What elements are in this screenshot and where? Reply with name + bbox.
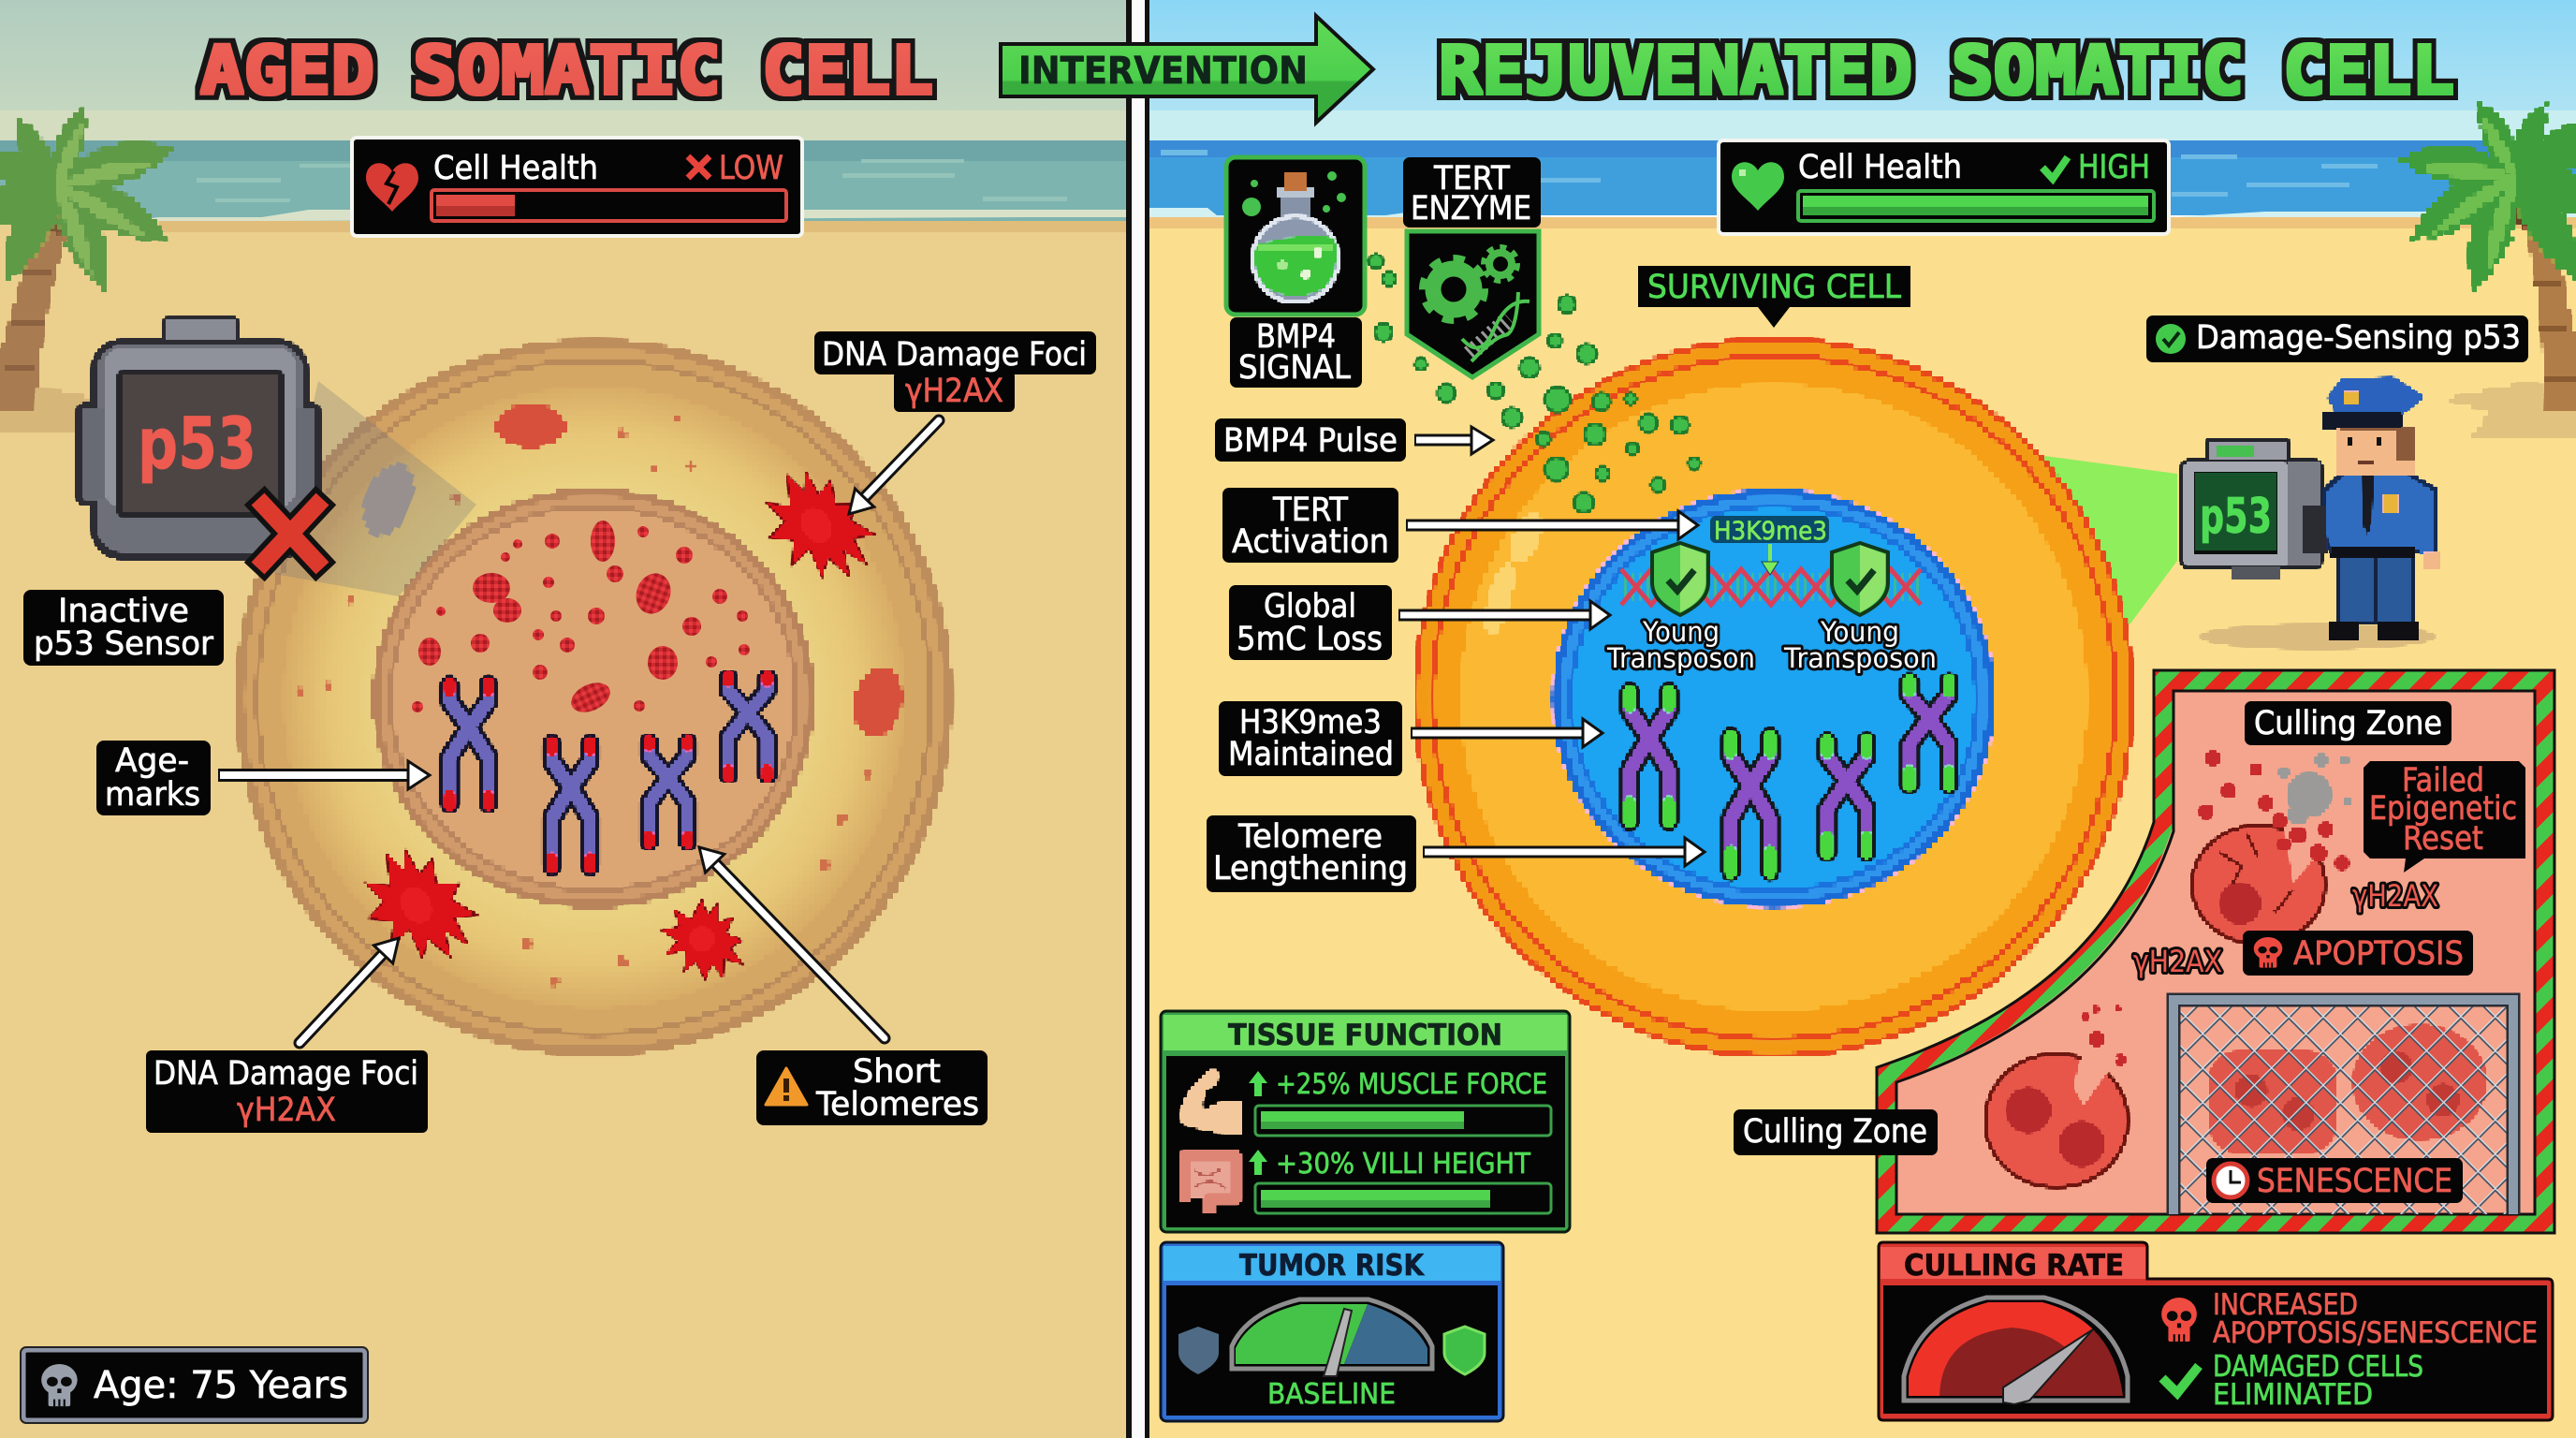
label: global 5mC loss: 5mC Loss: [1237, 621, 1383, 658]
stat: muscle force: [1249, 1068, 1551, 1136]
senescence cage: [2174, 1000, 2513, 1214]
icon: broken heart: [366, 163, 418, 212]
cracked cell lower: [1983, 1052, 2130, 1189]
panel: culling rate: ELIMINATED: [2213, 1378, 2373, 1412]
label: DNA damage foci upper: [814, 331, 1096, 412]
label: TERT activation: Activation: [1232, 523, 1389, 561]
icon: green shield: [1444, 1327, 1485, 1374]
label: senescence: [2206, 1158, 2463, 1203]
label: culling zone inner: Culling Zone: [2254, 705, 2442, 742]
label: young transposon left: Young: [1642, 616, 1720, 648]
inactive p53 sensor: p53: [138, 402, 256, 485]
label: surviving cell: SURVIVING CELL: [1647, 269, 1901, 306]
arrow: global 5mC loss: [1398, 601, 1610, 629]
health bar: high: [1719, 140, 2169, 234]
intervention arrow: INTERVENTION: [1018, 50, 1308, 93]
icon: intestine: [1185, 1156, 1236, 1214]
label: short telomeres: Telomeres: [815, 1086, 979, 1123]
shield: young transposon right: [1832, 543, 1888, 615]
label: H3K9me3 maintained: H3K9me3: [1239, 704, 1382, 741]
gauge: high culling: [1904, 1298, 2128, 1404]
grey organelle: [354, 457, 423, 543]
label: inactive p53 sensor: p53 Sensor: [34, 625, 214, 663]
label: age-marks: Age-: [115, 742, 189, 780]
arrow: age-marks to chromosome: [218, 761, 430, 789]
label: DNA damage foci lower: DNA Damage Foci: [154, 1055, 418, 1093]
title: rejuvenated somatic cell: CELL: [2283, 32, 2454, 110]
damage speckles in nucleus: [412, 521, 750, 718]
icon: clock: [2214, 1164, 2247, 1197]
label: inactive p53 sensor: [23, 590, 224, 666]
label: DNA damage foci upper: γH2AX: [905, 373, 1003, 410]
title: rejuvenated somatic cell: REJUVENATED: [1439, 32, 1912, 110]
age badge: Age: 75 Years: [94, 1364, 348, 1407]
grey smoke: [2278, 754, 2352, 825]
aged cell: [236, 339, 953, 1056]
label: TERT enzyme: ENZYME: [1411, 190, 1531, 227]
icon: green check: [2162, 1366, 2199, 1393]
stat: villi height: [1249, 1148, 1551, 1213]
age badge: [21, 1347, 368, 1423]
label: short telomeres: [756, 1050, 988, 1125]
health bar: low: [352, 138, 802, 236]
label: young transposon right: [1783, 616, 1937, 674]
cracked apoptotic cell: [2190, 824, 2329, 946]
label: telomere lengthening: [1207, 815, 1416, 892]
icon: flask: [1251, 171, 1340, 304]
chromosomes with long green telomeres: [1630, 681, 1949, 872]
label: apoptosis: [2243, 931, 2473, 976]
label: young transposon left: [1606, 616, 1755, 674]
panel: culling rate: INCREASED: [2213, 1288, 2358, 1322]
icon: red skull: [2161, 1298, 2197, 1342]
icon: skull: [41, 1364, 78, 1406]
panel: tissue function: TISSUE FUNCTION: [1228, 1019, 1502, 1052]
gauge: baseline: [1232, 1299, 1432, 1376]
label: TERT enzyme: [1403, 157, 1541, 227]
label: DNA damage foci upper: DNA Damage Foci: [822, 336, 1087, 374]
title: aged somatic cell: SOMATIC: [413, 32, 721, 110]
arrow: H3K9me3 down: [1762, 544, 1778, 575]
arrow: BMP4 pulse: [1414, 427, 1493, 454]
police officer holding scanner: [2200, 376, 2439, 650]
stat: muscle force: +25% MUSCLE FORCE: [1276, 1068, 1547, 1101]
icon: skull: [2254, 937, 2282, 968]
icon: gears: [1424, 247, 1517, 319]
cell body and nucleus: [236, 339, 953, 1056]
panel: culling rate: CULLING RATE: [1904, 1249, 2124, 1283]
cell body and nucleus: [1413, 337, 2134, 1058]
icon: green heart: [1732, 162, 1784, 211]
label: H3K9me3 maintained: [1219, 701, 1402, 776]
DNA helix with transposons: [1621, 569, 1924, 605]
label: H3K9me3 tag: H3K9me3: [1714, 517, 1827, 546]
label: BMP4 signal: [1230, 317, 1362, 388]
callout: failed epigenetic reset: Reset: [2403, 820, 2483, 858]
label: global 5mC loss: Global: [1264, 588, 1356, 625]
arrow: telomere lengthening: [1423, 838, 1705, 866]
health bar: high: HIGH: [2078, 149, 2150, 186]
health bar: low: Cell Health: [433, 150, 598, 187]
sensor beam, inactive: [274, 381, 476, 596]
label: young transposon right: Transposon: [1783, 642, 1937, 674]
green p53 scanning beam: [1966, 456, 2177, 655]
icon: DNA: [1462, 292, 1530, 361]
label: inactive p53 sensor: Inactive: [58, 593, 189, 630]
arrow: H3K9me3 maintained: [1411, 719, 1603, 747]
label: γH2AX in zone right: γH2AX: [2352, 878, 2438, 914]
panel: tumor risk: TUMOR RISK: [1239, 1249, 1425, 1283]
title: rejuvenated somatic cell: [1439, 32, 2454, 110]
shield: young transposon left: [1652, 543, 1708, 615]
label: apoptosis: APOPTOSIS: [2293, 935, 2464, 973]
title: aged somatic cell: AGED: [200, 32, 374, 110]
label: BMP4 signal: BMP4: [1256, 318, 1336, 356]
DNA damage foci: [344, 449, 888, 985]
green BMP4 particles: [1369, 255, 1700, 512]
inactive p53 sensor: [76, 316, 321, 562]
panel: TERT shield with gears and DNA: [1407, 231, 1539, 377]
label: culling zone outer: Culling Zone: [1743, 1113, 1927, 1151]
icon: flexed arm: [1180, 1069, 1241, 1135]
label: DNA damage foci lower: [146, 1050, 428, 1133]
label: BMP4 pulse: BMP4 Pulse: [1223, 422, 1398, 460]
stat: villi height: +30% VILLI HEIGHT: [1276, 1148, 1531, 1181]
arrow: TERT activation: [1406, 511, 1698, 539]
arrow: to lower foci: [300, 938, 399, 1043]
label: damage-sensing p53: Damage-Sensing p53: [2196, 319, 2521, 357]
label: young transposon left: Transposon: [1606, 642, 1755, 674]
background: rejuvenated beach scene: [1149, 0, 2576, 1438]
label: young transposon right: Young: [1820, 616, 1899, 648]
label: surviving cell: [1638, 266, 1910, 328]
label: global 5mC loss: [1229, 585, 1392, 660]
red debris: [2082, 751, 2349, 1077]
rejuvenated cell: [1369, 255, 2134, 1058]
title: aged somatic cell: CELL: [762, 32, 933, 110]
panel: culling rate: DAMAGED CELLS: [2213, 1350, 2423, 1384]
active p53 scanner: p53: [2200, 489, 2272, 545]
label: BMP4 signal: SIGNAL: [1238, 349, 1351, 387]
active p53 scanner: [2180, 438, 2323, 579]
label: TERT activation: [1222, 488, 1398, 563]
health bar: low: LOW: [719, 150, 783, 187]
panel: tissue function: [1161, 1011, 1570, 1232]
panel: BMP4 potion: [1226, 157, 1365, 315]
title: aged somatic cell: [200, 32, 933, 110]
label: TERT activation: TERT: [1272, 492, 1349, 529]
panel: culling rate: APOPTOSIS/SENESCENCE: [2213, 1316, 2538, 1350]
health bar: high: Cell Health: [1798, 149, 1962, 186]
title: rejuvenated somatic cell: SOMATIC: [1952, 32, 2244, 110]
label: telomere lengthening: Lengthening: [1213, 850, 1408, 888]
left palm tree: [0, 101, 182, 434]
arrow: to upper foci: [849, 420, 939, 514]
label: DNA damage foci lower: γH2AX: [237, 1092, 336, 1129]
intervention arrow: [1001, 16, 1373, 123]
right palm tree: [2396, 95, 2576, 440]
icon: warning triangle: [766, 1068, 807, 1105]
panel: culling rate: [1879, 1242, 2553, 1420]
label: γH2AX in zone left: γH2AX: [2133, 944, 2222, 979]
label: H3K9me3 maintained: Maintained: [1228, 736, 1394, 773]
callout: failed epigenetic reset: Epigenetic: [2369, 790, 2517, 828]
label: short telomeres: Short: [853, 1053, 941, 1091]
label: TERT enzyme: TERT: [1433, 160, 1511, 198]
callout: failed epigenetic reset: [2364, 761, 2525, 873]
label: age-marks: [96, 741, 211, 815]
chromosomes with short red telomeres: [449, 677, 768, 867]
label: damage-sensing p53: [2146, 315, 2528, 362]
panel: culling zone: [1887, 681, 2544, 1223]
icon: green check: [2156, 324, 2186, 354]
panel: tumor risk: [1161, 1242, 1503, 1421]
icon: slate shield: [1178, 1327, 1219, 1374]
centre divider: [1126, 0, 1149, 1438]
arrow: to short telomeres: [699, 847, 885, 1038]
label: telomere lengthening: Telomere: [1237, 818, 1383, 856]
panel: tumor risk: BASELINE: [1267, 1378, 1396, 1411]
label: age-marks: marks: [105, 776, 200, 814]
background: aged beach scene: [0, 0, 1127, 1438]
callout: failed epigenetic reset: Failed: [2402, 762, 2484, 800]
label: senescence: SENESCENCE: [2257, 1163, 2452, 1200]
